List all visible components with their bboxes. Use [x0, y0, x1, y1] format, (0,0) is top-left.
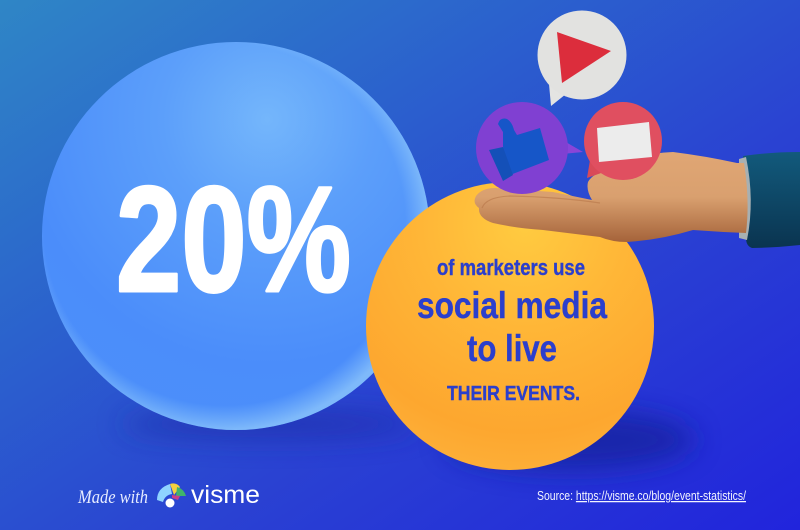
made with: Made with [77, 487, 148, 508]
icon: hand with sleeve [475, 152, 800, 248]
yellow sphere [366, 182, 654, 470]
bubble tail [562, 141, 583, 154]
white rectangle [597, 122, 652, 162]
line: social media: social media [417, 285, 607, 326]
line: THEIR EVENTS.: THEIR EVENTS. [447, 383, 580, 405]
thumb cuff [489, 147, 513, 181]
shadow: blue sphere [120, 410, 420, 438]
icon: purple like bubble [476, 102, 583, 194]
bubble body [584, 102, 662, 180]
bubble tail [587, 160, 604, 178]
bubble body [538, 10, 626, 100]
visme wordmark: visme [191, 481, 260, 509]
play triangle [557, 32, 611, 83]
icon: white play bubble [538, 10, 626, 106]
line: to live: to live [467, 328, 557, 369]
big stat: 20%: 20% [116, 155, 351, 323]
thumb up [498, 119, 549, 175]
logo: made with visme [77, 481, 260, 509]
finger crease [482, 196, 600, 208]
shadow: yellow sphere [445, 410, 695, 470]
icon: red video bubble [584, 102, 662, 180]
statement text [417, 255, 607, 405]
cuff [739, 157, 751, 240]
bubble body [476, 102, 568, 194]
hand [475, 152, 748, 242]
line: of marketers use: of marketers use [437, 255, 585, 280]
source citation: Source: https://visme.co/blog/event-statistics/ [537, 489, 746, 503]
blue sphere [42, 42, 430, 430]
logo mark [157, 483, 186, 508]
sleeve [743, 152, 800, 248]
bubble tail [549, 84, 566, 106]
